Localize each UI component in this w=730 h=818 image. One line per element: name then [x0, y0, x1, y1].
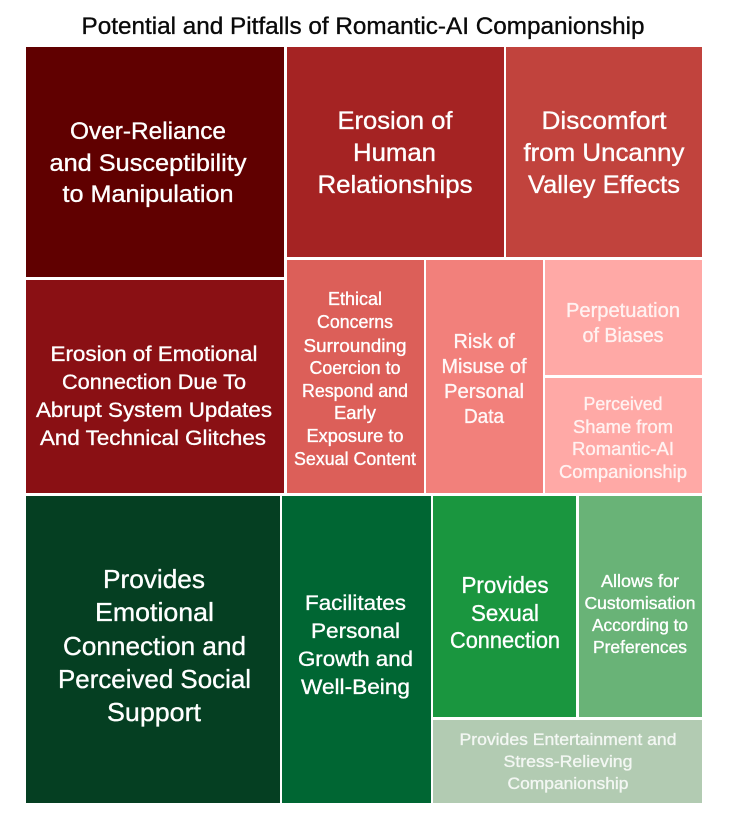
panel: sexual connection	[433, 496, 576, 717]
panel: emotional connection: Provides	[103, 564, 205, 594]
panel: entertainment	[433, 720, 702, 803]
panel: emotional connection: Support	[107, 697, 202, 727]
panel: over-reliance: Over-Reliance	[70, 118, 226, 145]
panel: entertainment: Stress-Relieving	[504, 752, 632, 771]
panel: personal growth	[282, 496, 431, 803]
panel: entertainment: Companionship	[508, 774, 628, 793]
panel: ethical concerns: Surrounding	[304, 336, 406, 356]
panel: customisation: Customisation	[584, 593, 696, 613]
panel: erosion of emotional connection: Abrupt System Updates	[36, 399, 272, 422]
panel: erosion of emotional connection: And Technical Glitches	[40, 427, 266, 450]
panel: customisation: Allows for	[601, 571, 679, 591]
panel: erosion of emotional connection	[26, 280, 284, 493]
panel: misuse of data	[426, 260, 543, 493]
panel: erosion of human relationships: Erosion of	[338, 107, 453, 135]
panel: emotional connection: Connection and	[63, 631, 246, 661]
panel: biases: of Biases	[582, 325, 664, 347]
panel: ethical concerns	[287, 260, 424, 493]
panel: misuse of data: Data	[464, 406, 505, 428]
panel: perceived shame	[545, 378, 702, 493]
panel: sexual connection: Sexual	[471, 600, 539, 626]
panel: misuse of data: Risk of	[454, 331, 515, 353]
panel: personal growth: Growth and	[298, 648, 413, 671]
panel: ethical concerns: Coercion to	[310, 358, 400, 378]
panel: over-reliance: to Manipulation	[62, 181, 234, 208]
panel: personal growth: Personal	[311, 620, 400, 643]
panel: misuse of data: Personal	[444, 381, 524, 403]
panel: ethical concerns: Ethical	[328, 289, 382, 309]
panel: ethical concerns: Exposure to	[306, 426, 404, 446]
panel: ethical concerns: Respond and	[302, 381, 408, 401]
panel: uncanny valley: Valley Effects	[528, 171, 680, 199]
panel: over-reliance	[26, 47, 284, 277]
panel: customisation: Preferences	[593, 637, 687, 657]
panel: sexual connection: Connection	[450, 627, 560, 653]
panel: ethical concerns: Concerns	[317, 312, 393, 332]
panel: emotional connection: Perceived Social	[58, 664, 251, 694]
panel: customisation	[579, 496, 702, 717]
panel: uncanny valley: Discomfort	[542, 107, 667, 135]
panel: perceived shame: Shame from	[573, 417, 673, 437]
panel: biases: Perpetuation	[566, 300, 680, 322]
panel: emotional connection	[26, 496, 280, 803]
panel: misuse of data: Misuse of	[442, 356, 527, 378]
panel: erosion of human relationships: Human	[353, 139, 436, 167]
panel: perceived shame: Companionship	[559, 462, 687, 482]
panel: perceived shame: Perceived	[584, 394, 662, 414]
panel: uncanny valley: from Uncanny	[524, 139, 685, 167]
panel: customisation: According to	[592, 615, 688, 635]
panel: biases	[545, 260, 702, 375]
panel: ethical concerns: Sexual Content	[294, 449, 416, 469]
panel: perceived shame: Romantic-AI	[572, 439, 674, 459]
panel: erosion of human relationships	[287, 47, 504, 257]
panel: personal growth: Well-Being	[301, 676, 410, 699]
panel: sexual connection: Provides	[462, 572, 548, 598]
panel: entertainment: Provides Entertainment and	[460, 730, 676, 749]
panel: personal growth: Facilitates	[305, 592, 406, 615]
panel: erosion of emotional connection: Connection Due To	[62, 371, 246, 394]
panel: uncanny valley	[506, 47, 702, 257]
panel: ethical concerns: Early	[334, 403, 376, 423]
panel: emotional connection: Emotional	[95, 597, 214, 627]
panel: erosion of human relationships: Relationships	[318, 171, 472, 199]
title: Potential and Pitfalls of Romantic-AI Companionship	[82, 13, 644, 40]
panel: erosion of emotional connection: Erosion of Emotional	[50, 343, 258, 366]
panel: over-reliance: and Susceptibility	[50, 150, 246, 177]
